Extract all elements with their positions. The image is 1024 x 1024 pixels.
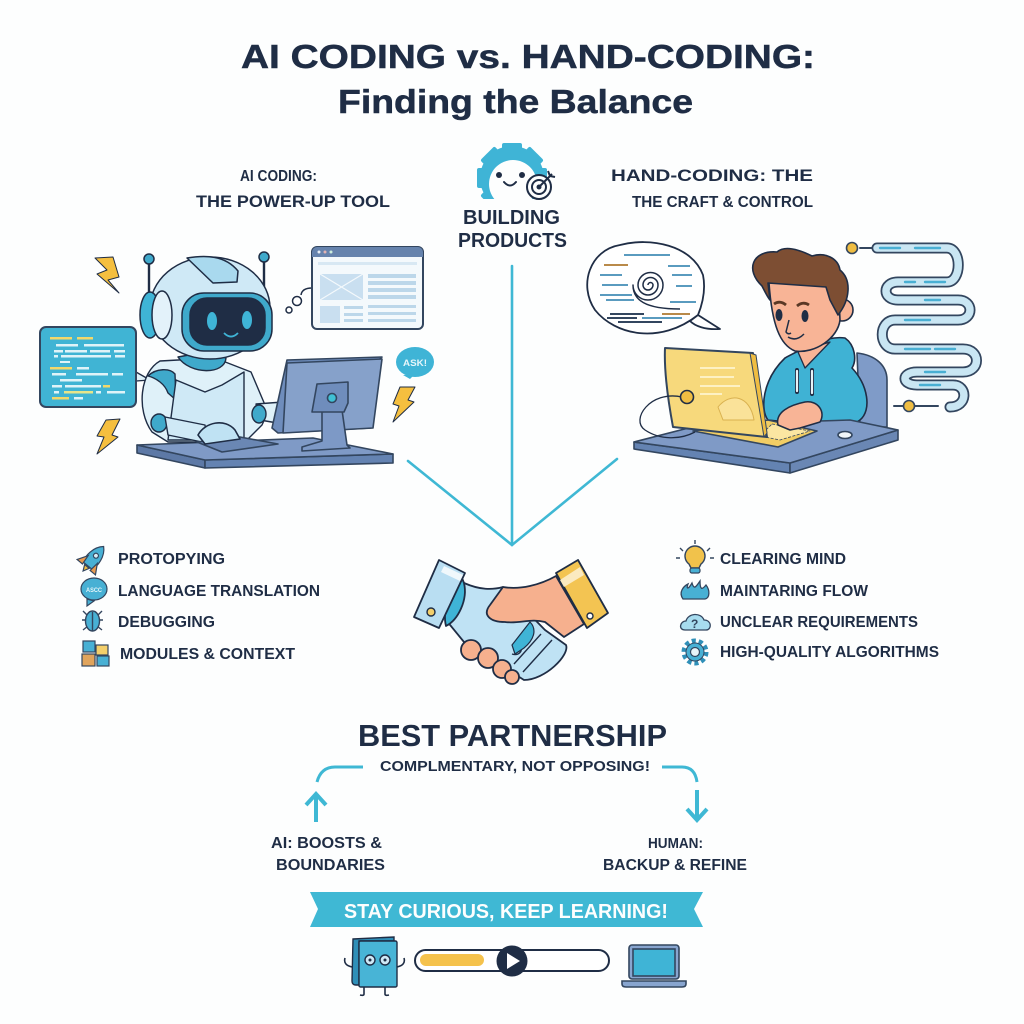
list: hand-coding uses: CLEARING MIND [720,551,846,568]
heading: hand-coding [611,166,813,211]
robot body [142,352,283,443]
subheading: COMPLMENTARY, NOT OPPOSING! [380,759,650,775]
icon: lightning bolts [95,257,415,454]
human fingers [461,640,519,684]
hoodie strings [797,370,812,394]
title [241,38,815,120]
icon: waves [681,581,709,599]
robot head [140,252,272,359]
human hand [487,576,584,637]
AI role text: AI: BOOSTS & [271,835,382,852]
icon: book mascot [345,937,404,995]
list: hand-coding uses: MAINTARING FLOW [720,583,869,600]
AI role text: BOUNDARIES [276,857,385,874]
center badge: building products [458,143,567,252]
progress bar [415,946,609,976]
ASK bubble: ASK! [403,358,427,369]
heading: AI coding: AI CODING: [240,168,317,185]
best partnership heading: BEST PARTNERSHIP [358,718,667,753]
icon: language bubble [81,578,107,606]
list: hand-coding uses: HIGH-QUALITY ALGORITHMS [720,644,939,661]
robot cuff [414,560,465,628]
center badge: building products: BUILDING [463,207,560,229]
icon: module cubes [82,641,109,666]
human role text [603,836,747,874]
icon: light bulb [676,540,714,573]
illustration: AI robot at desk [40,247,434,468]
list: hand-coding uses: UNCLEAR REQUIREMENTS [720,614,918,631]
chair [857,353,887,427]
browser thought bubble [286,247,423,329]
robot hand [446,583,566,680]
arrow: up-left cycle [306,767,363,822]
title: Finding the Balance [338,83,693,120]
desk [137,438,393,468]
hoodie body [764,338,867,427]
heading: hand-coding: THE CRAFT & CONTROL [632,194,813,211]
code spiral speech bubble [587,242,720,334]
banner: STAY CURIOUS, KEEP LEARNING! [344,901,668,923]
icon: smiling gear [465,143,560,217]
icon: laptop [622,945,686,987]
list: AI coding uses: PROTOPYING [118,551,225,568]
desk [634,420,898,473]
heading: AI coding [196,168,390,211]
connector lines [408,266,617,545]
human cuff [556,560,608,628]
code path serpentine [846,242,976,412]
arrow: down-right cycle [662,767,707,820]
title: AI CODING vs. HAND-CODING: [241,38,815,75]
heading: AI coding: THE POWER-UP TOOL [196,192,390,211]
head and hair [753,249,853,351]
code panel [40,327,150,407]
list: AI coding uses: LANGUAGE TRANSLATION [118,583,320,600]
handshake illustration [414,560,608,684]
computer monitor and keyboard [197,357,382,452]
icon: question cloud [681,614,710,631]
list: hand-coding uses [676,540,939,663]
illustration: human coding on laptop [587,242,976,473]
list: AI coding uses [74,539,320,666]
human role text: BACKUP & REFINE [603,857,747,874]
icon: rocket [74,539,113,579]
banner [310,892,703,927]
AI role text [271,835,385,874]
neck [798,342,830,368]
list: AI coding uses: DEBUGGING [118,614,215,631]
heading: hand-coding: HAND-CODING: THE [611,166,813,185]
icon: gear [684,641,706,663]
center badge: building products: PRODUCTS [458,230,567,252]
ASK bubble [396,347,434,379]
icon: language bubble: ASCC [86,587,102,594]
robot fingers [512,624,552,672]
icon: question cloud: ? [691,617,698,631]
yellow laptop [640,348,822,447]
list: AI coding uses: MODULES & CONTEXT [120,646,295,663]
icon: bug [82,611,103,631]
human role text: HUMAN: [648,836,703,852]
